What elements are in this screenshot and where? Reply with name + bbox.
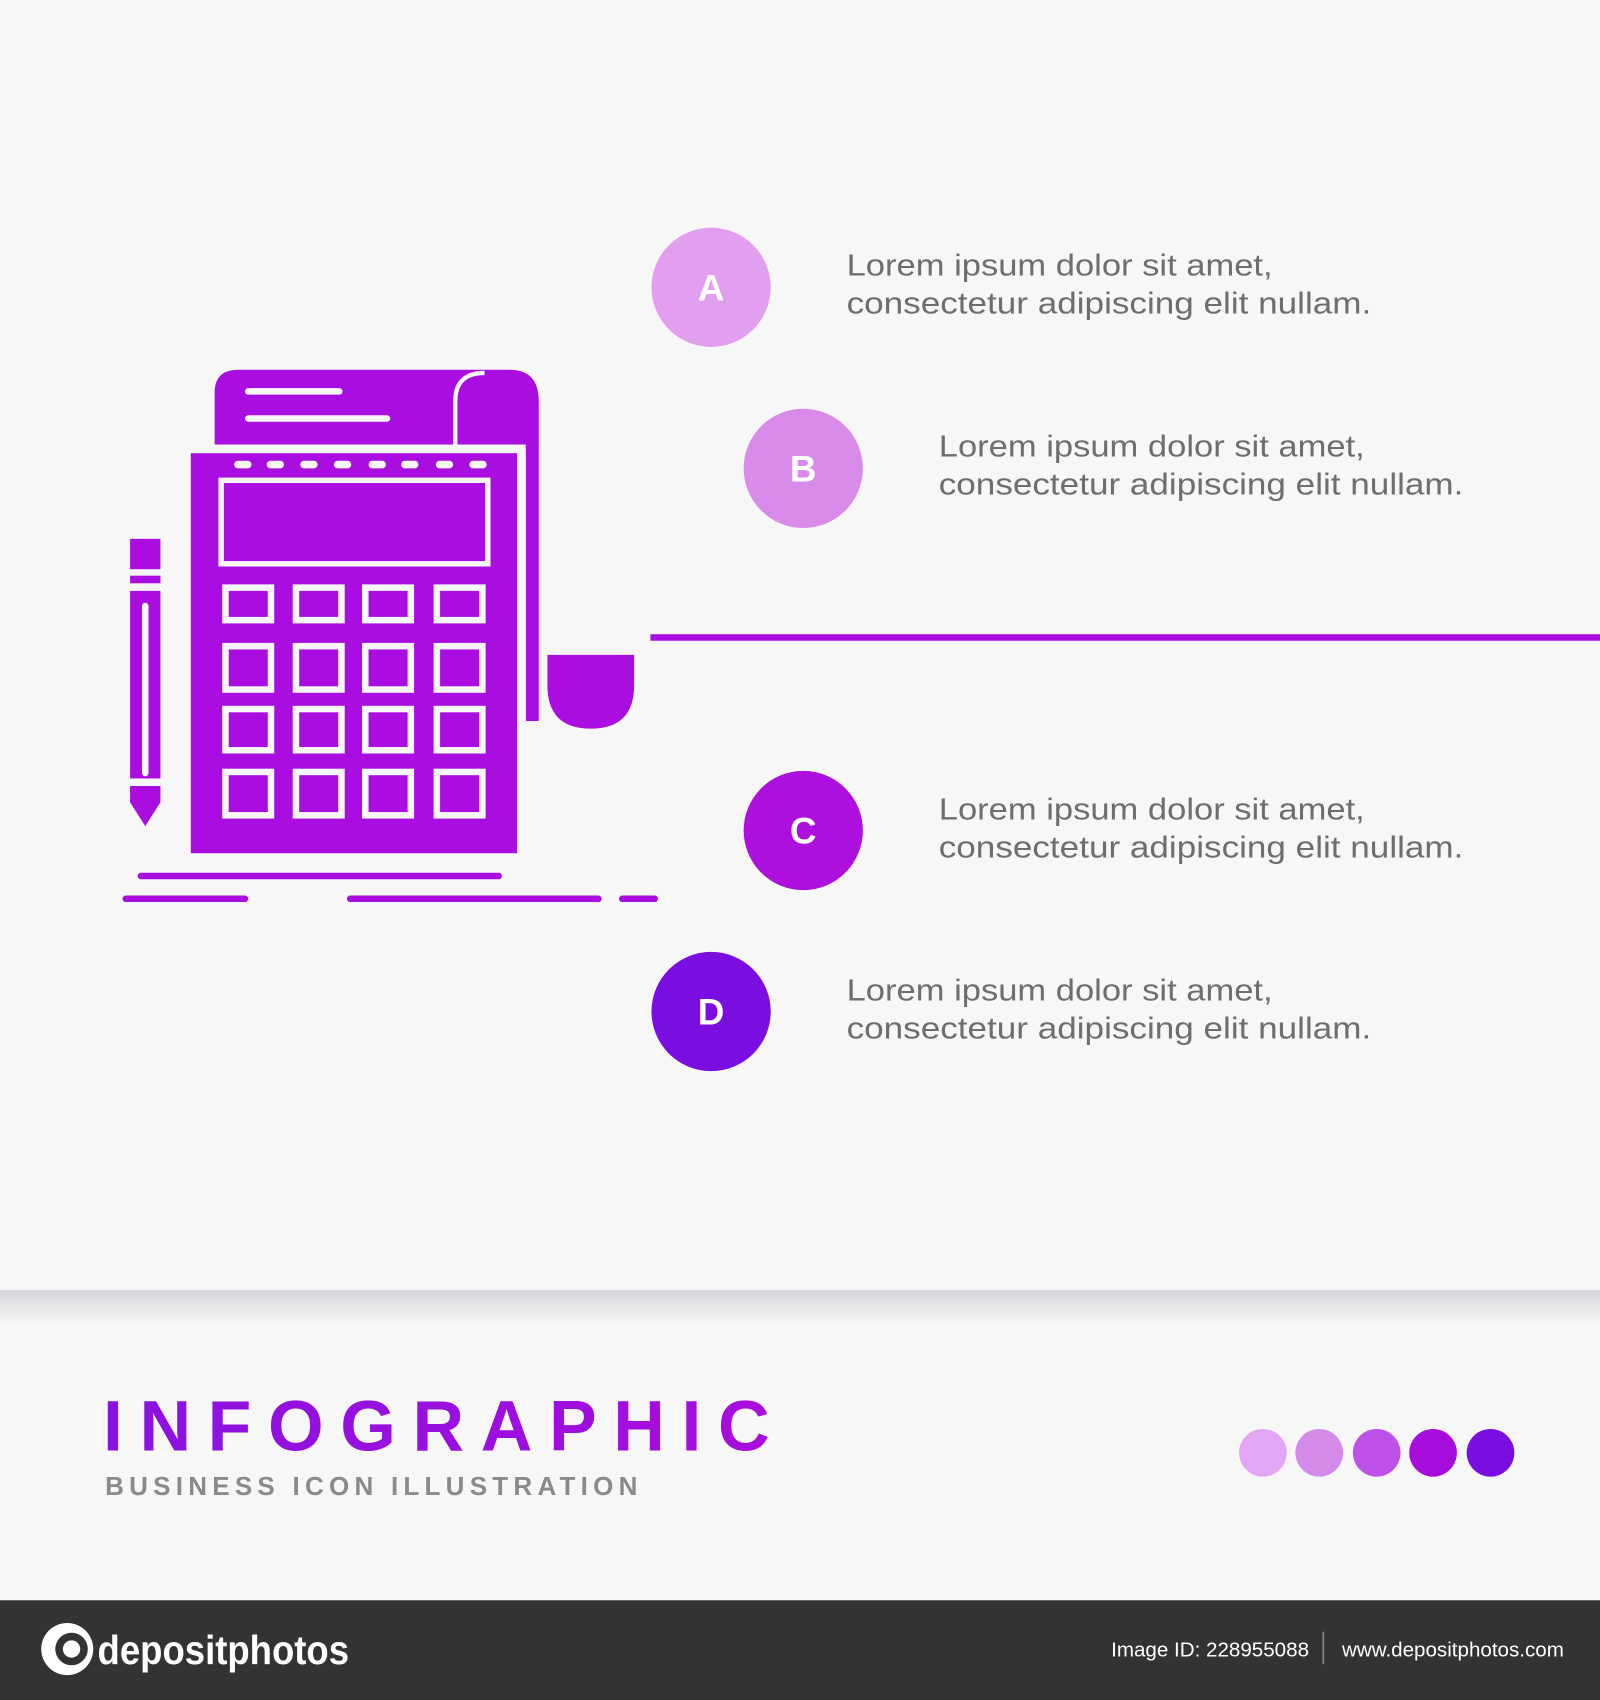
step A (651, 228, 1371, 347)
bottom bar: depositphotos (98, 1627, 349, 1673)
step D: D (698, 992, 724, 1033)
dots (1239, 1429, 1514, 1477)
divider line (650, 634, 1600, 641)
step B: consectetur adipiscing elit nullam. (939, 468, 1463, 501)
step B: Lorem ipsum dolor sit amet, (939, 430, 1365, 463)
step C (744, 771, 1463, 890)
bottom bar (0, 1600, 1600, 1700)
bottom bar: www.depositphotos.com (1341, 1639, 1564, 1662)
bottom bar: Image ID: 228955088 (1111, 1639, 1309, 1662)
icon: calculator with receipt and pencil (122, 370, 658, 902)
step B: B (790, 448, 817, 489)
step D (651, 952, 1371, 1071)
title: INFOGRAPHIC (103, 1387, 770, 1467)
step C: consectetur adipiscing elit nullam. (939, 832, 1463, 865)
step A: Lorem ipsum dolor sit amet, (847, 249, 1273, 282)
subtitle: BUSINESS ICON ILLUSTRATION (105, 1471, 637, 1501)
step C: C (790, 810, 817, 851)
step D: consectetur adipiscing elit nullam. (847, 1013, 1371, 1046)
step A: A (698, 267, 724, 308)
step D: Lorem ipsum dolor sit amet, (847, 975, 1273, 1008)
step B (744, 409, 1463, 528)
step A: consectetur adipiscing elit nullam. (847, 287, 1371, 320)
footer shadow (0, 1290, 1600, 1325)
step C: Lorem ipsum dolor sit amet, (939, 794, 1365, 827)
